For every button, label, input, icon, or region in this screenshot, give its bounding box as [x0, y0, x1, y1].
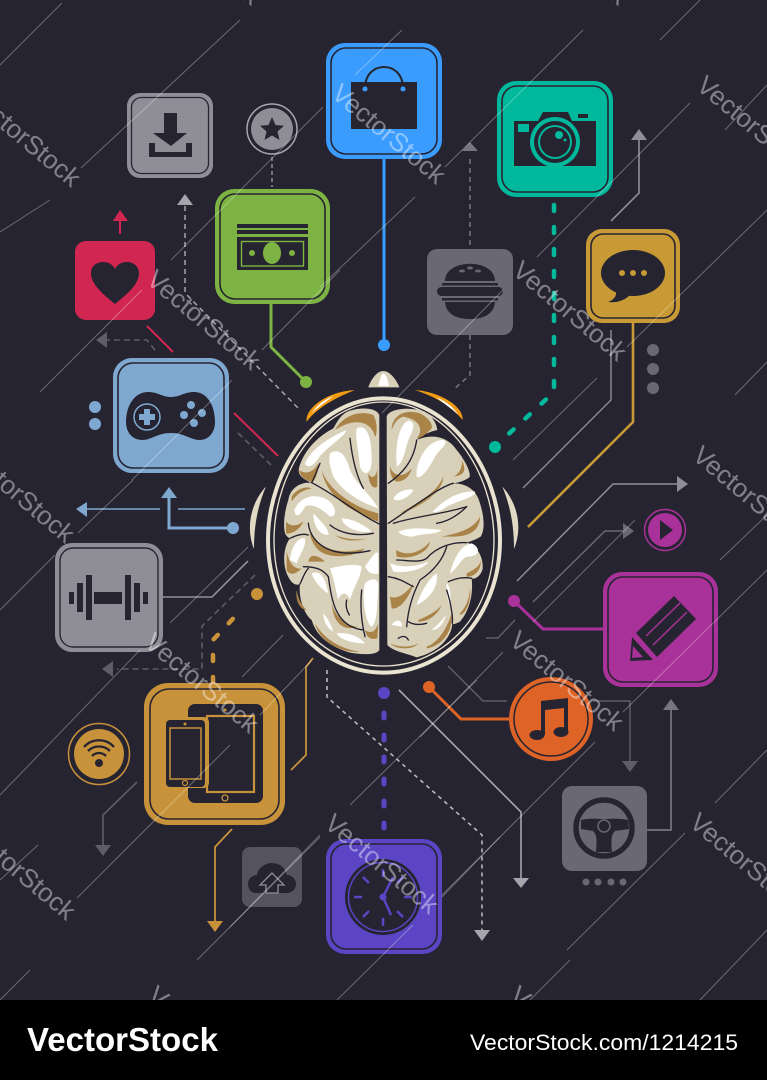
- connector: grey dashed arrow to left: [102, 575, 255, 677]
- brain: side marks: [250, 487, 518, 549]
- watermarks: VectorStock: [319, 808, 445, 920]
- icon: chat bubble tile: [586, 229, 680, 323]
- icon: wifi badge: [68, 724, 130, 784]
- connector: grey arrow top right: [611, 129, 647, 221]
- connector: yellow lines near tablet: [207, 658, 313, 932]
- brain: orange arcs: [307, 390, 463, 422]
- connector: star dashed: [271, 157, 273, 187]
- footer bar: [0, 1000, 767, 1080]
- connectors and arrows: [76, 129, 688, 941]
- icon: play badge: [644, 510, 686, 550]
- icon: star badge: [247, 104, 297, 154]
- brain: top cap: [368, 371, 399, 387]
- connector: orange music: [423, 681, 509, 719]
- icon: devices tile: [144, 683, 285, 825]
- icon: heart tile: [75, 241, 155, 320]
- icon: pencil tile: [603, 572, 718, 687]
- connector: magenta pen: [508, 595, 603, 629]
- connector: grey line arrow bottom: [399, 690, 529, 888]
- brain: [250, 371, 518, 673]
- dots: controller side: [89, 401, 101, 430]
- watermarks: VectorStock: [507, 255, 633, 367]
- connector: long grey line to camera side: [523, 330, 611, 488]
- connector: wifi arrow: [95, 782, 137, 856]
- icon: cloud tile: [242, 847, 302, 907]
- footer logo text: VectorStock: [27, 1021, 219, 1058]
- connector: red lines: [147, 326, 278, 456]
- connector: white dashed arrow bottom: [327, 670, 490, 941]
- watermarks: VectorStock: [326, 78, 452, 190]
- brain: right hemisphere: [387, 409, 484, 657]
- connector: music side greys: [448, 620, 638, 772]
- watermarks: VectorStock: [504, 625, 630, 737]
- connector: blue bag: [378, 159, 390, 351]
- icon: shopping bag tile: [326, 43, 442, 159]
- connector: weights line: [163, 561, 248, 597]
- icon: clock tile: [326, 839, 442, 954]
- watermarks: VectorStock: [139, 627, 265, 739]
- icon: download tile: [127, 93, 213, 178]
- footer image id: VectorStock.com/1214215: [470, 1030, 738, 1055]
- dots: wheel row: [582, 878, 626, 886]
- connector: burger dashed arrow: [453, 142, 478, 390]
- connector: purple clock dashed: [378, 687, 390, 830]
- connector: grey dashed arrow from game: [96, 332, 272, 466]
- connector: wheel arrow: [647, 699, 679, 830]
- icon: music badge: [509, 677, 593, 761]
- brain: left hemisphere: [284, 409, 379, 654]
- connector: yellow chat: [528, 323, 633, 527]
- dots: grey column: [647, 344, 659, 394]
- icon: money tile: [215, 189, 330, 304]
- icon: steering wheel tile: [562, 786, 647, 871]
- connector: heart arrow: [113, 210, 128, 234]
- connector: green money: [271, 304, 312, 388]
- icon: game controller tile: [113, 358, 229, 473]
- connector: top right long arrow: [517, 476, 688, 581]
- connector: download dashed arrow: [177, 194, 300, 410]
- connector: tablet dashed: [213, 588, 263, 683]
- connector: blue arrows: [76, 487, 245, 534]
- brain: head outline: [268, 398, 500, 673]
- watermarks: VectorStock: [141, 264, 267, 376]
- icon: camera tile: [497, 81, 613, 197]
- connector: grey arrow to play: [533, 523, 634, 602]
- icon: dumbbell tile: [55, 543, 163, 652]
- connector: teal camera dashed: [489, 205, 554, 453]
- icon: burger tile: [427, 249, 513, 335]
